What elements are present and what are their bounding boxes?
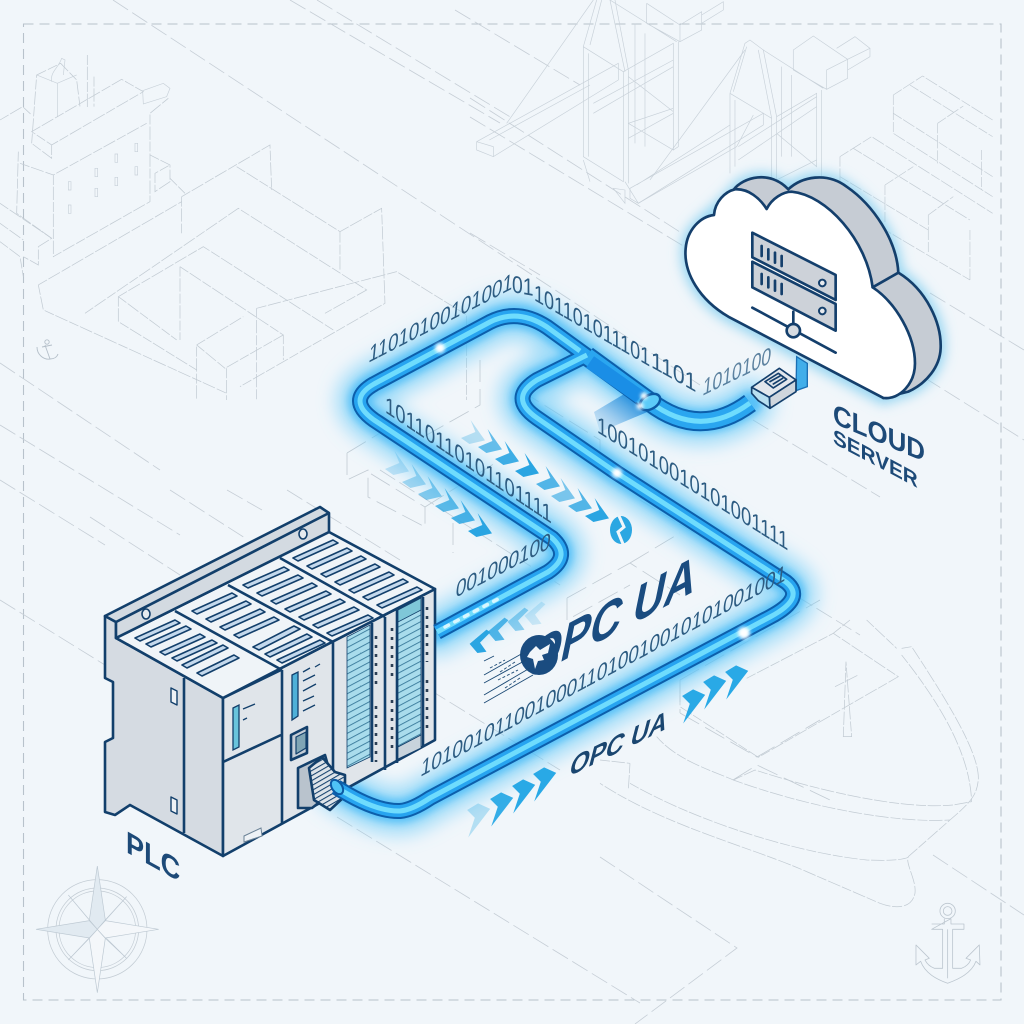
rail screws [142, 529, 307, 619]
bottom tab [244, 828, 262, 842]
label: Server: SERVER [833, 425, 918, 493]
crane two [630, 36, 870, 203]
ethernet connector [298, 755, 345, 810]
cable: fiber run from PLC to cloud [328, 316, 793, 811]
crane one [477, 0, 753, 203]
stub cable end loop [637, 390, 663, 414]
anchor mark on ship [37, 340, 58, 359]
lower binary stream: 10100101100100011010010010101001001 [419, 559, 788, 783]
cloud glow [685, 177, 941, 400]
cable end cap [328, 778, 346, 796]
binary data streams [367, 268, 788, 783]
PLC device [105, 507, 435, 856]
chevrons: lower right [682, 665, 748, 724]
chevrons: inner right [461, 420, 609, 522]
logo network lines [484, 653, 533, 703]
upper binary tail: 1010100 [701, 342, 773, 402]
cloud server [685, 177, 941, 408]
left side face [105, 616, 223, 856]
label: Cloud: CLOUD [833, 398, 925, 468]
upper binary descending end: 1101 [651, 346, 696, 398]
cloud front face [685, 189, 915, 398]
module dividers [175, 558, 423, 833]
mid-field deck boxes [347, 330, 830, 800]
cable blue body [336, 316, 793, 811]
label: OPC UA: OPC UA [566, 704, 671, 784]
terminal dots [376, 607, 427, 762]
logo wordmark: OPC UA [522, 542, 703, 694]
right front face [223, 589, 435, 856]
large OPC UA logo [484, 542, 703, 703]
cable dark sheath wide section [587, 356, 750, 421]
compass rose [36, 866, 159, 993]
cable light core [336, 316, 793, 811]
short binary stream: 001000100 [454, 527, 552, 604]
container stacks [840, 76, 993, 280]
logo globe [520, 635, 558, 675]
ship bow [600, 620, 978, 907]
sync icon [610, 516, 632, 544]
upper binary descending: 101101011101 [534, 279, 650, 373]
ship superstructure [0, 55, 467, 400]
chevrons: lower left [467, 767, 556, 838]
mounting rail [105, 507, 329, 638]
top vents [135, 540, 422, 676]
chevrons: inner left [385, 451, 492, 537]
cloud side depth [733, 177, 941, 398]
chevrons: toward PLC [470, 602, 545, 653]
network node [752, 308, 836, 353]
side slots [171, 688, 177, 814]
anchor emblem [916, 903, 980, 983]
cable glow [338, 316, 793, 811]
teal IO panels [347, 598, 421, 768]
front switch [291, 727, 307, 760]
RJ45 plug [752, 368, 796, 408]
lighter band after junction [590, 362, 640, 397]
light glints [435, 343, 750, 639]
cable blue body wide section [587, 356, 750, 421]
top plate [116, 532, 435, 698]
upper binary rising: 11010100101001 [367, 268, 514, 369]
inner binary stream: 10110110101101111 [385, 391, 552, 530]
upper binary peak: 01 [512, 271, 534, 302]
cable drop to connector [796, 357, 807, 391]
label: PLC: PLC [126, 824, 180, 889]
quay crane and containers [477, 0, 993, 280]
data beads [445, 599, 498, 627]
right binary stream: 1001010010101001111 [597, 411, 788, 557]
status LED strips and marks [233, 664, 320, 750]
server rack [752, 233, 836, 331]
stub cable segment [594, 387, 652, 432]
cable dark sheath [336, 316, 793, 811]
